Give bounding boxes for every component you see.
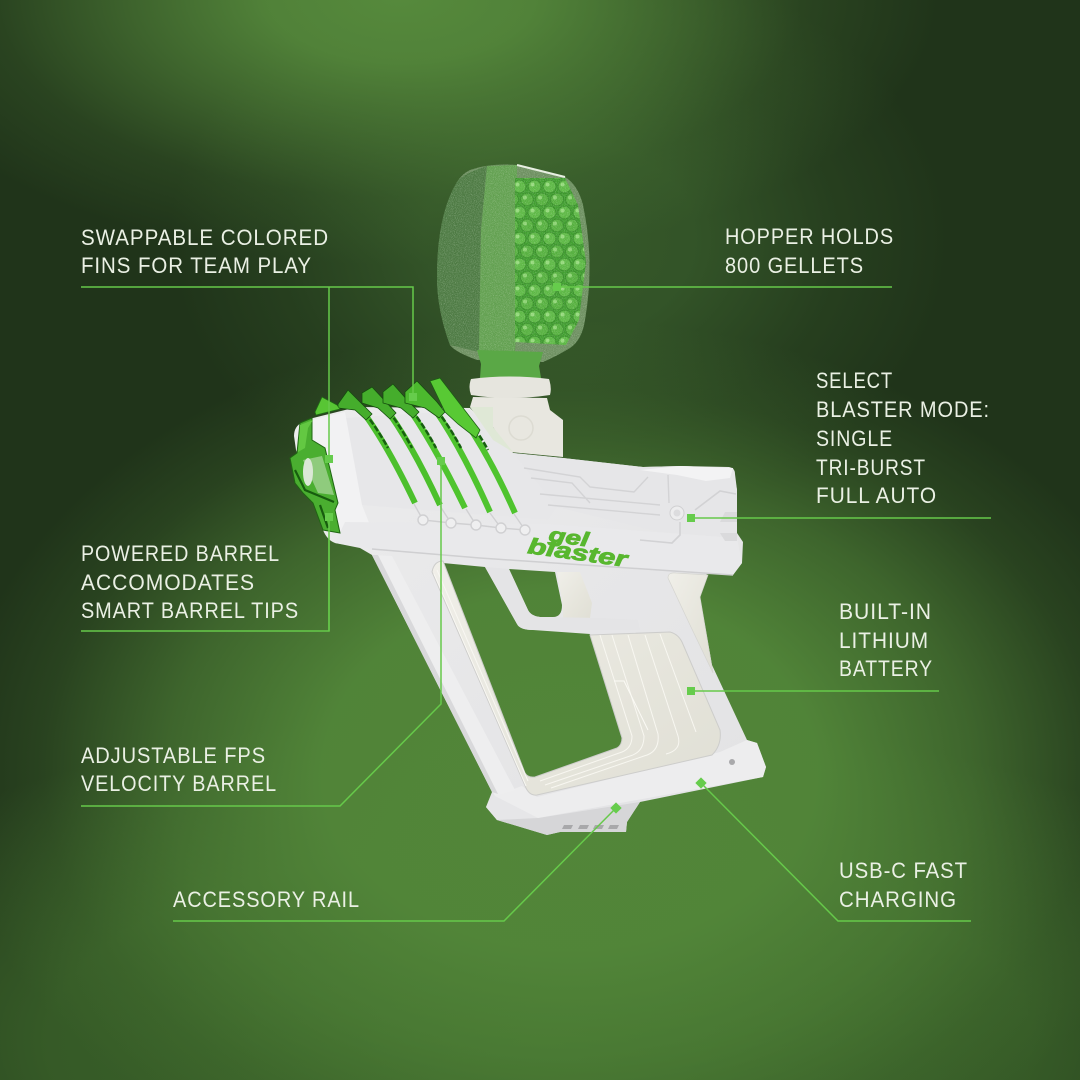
label: battery — [839, 599, 933, 681]
smart barrel muzzle — [290, 418, 340, 533]
hopper middle facet — [479, 165, 517, 358]
fin 1 — [338, 390, 415, 503]
label: hopper — [725, 224, 894, 278]
label: swappable fins: FINS FOR TEAM PLAY — [81, 253, 312, 278]
gel blaster logo — [526, 524, 631, 572]
leader line and markers: powered barrel — [325, 287, 333, 631]
fin link nodes — [414, 504, 530, 535]
front strut shade — [372, 555, 498, 794]
fin 2 — [362, 387, 440, 505]
leader line and marker: battery — [687, 687, 939, 695]
label: blaster mode: SELECT — [816, 368, 893, 393]
label: USB-C — [839, 858, 968, 912]
label: blaster mode: TRI-BURST — [816, 455, 926, 480]
label: adjustable FPS — [81, 743, 277, 796]
trigger — [557, 572, 592, 618]
fin base crest — [315, 397, 340, 415]
trigger guard — [485, 567, 640, 630]
label: adjustable FPS: VELOCITY BARREL — [81, 771, 277, 796]
receiver upper right — [513, 453, 737, 543]
grip screw — [729, 759, 735, 765]
label: powered barrel — [81, 541, 299, 623]
front strut highlight — [372, 555, 515, 796]
grip inlay — [432, 561, 720, 795]
label: blaster mode — [816, 368, 990, 508]
leader line and marker: accessory rail — [173, 802, 622, 921]
fin 3 — [383, 384, 465, 508]
label: swappable fins: SWAPPABLE COLORED — [81, 225, 329, 250]
label: hopper: HOPPER HOLDS — [725, 224, 894, 249]
leader line and marker: adjustable FPS — [81, 457, 445, 806]
receiver lower band — [335, 522, 742, 575]
label: battery: LITHIUM — [839, 628, 929, 653]
label: USB-C: USB-C FAST — [839, 858, 968, 883]
label: accessory rail: ACCESSORY RAIL — [173, 887, 360, 912]
hopper frosted grain — [437, 164, 590, 362]
leader line and marker: swappable fins — [81, 287, 417, 401]
label: powered barrel: SMART BARREL TIPS — [81, 598, 299, 623]
label: blaster mode: BLASTER MODE: — [816, 397, 990, 422]
backstrap inlay — [668, 573, 713, 673]
gel blaster logo: gel — [546, 524, 591, 552]
accessory rail — [486, 795, 640, 835]
leader line and marker: hopper — [553, 283, 892, 291]
label: swappable fins — [81, 225, 329, 278]
fins — [315, 378, 530, 535]
receiver rear panel — [303, 410, 557, 530]
fin 5 — [430, 378, 515, 513]
gel blaster product illustration — [290, 160, 766, 835]
hopper neck — [477, 350, 543, 378]
label: powered barrel: POWERED BARREL — [81, 541, 280, 566]
label: battery: BUILT-IN — [839, 599, 932, 624]
hopper — [437, 164, 590, 378]
hopper right facet with gellets — [515, 178, 586, 345]
hopper top glint — [517, 165, 565, 177]
hopper left facet — [437, 166, 487, 352]
label: USB-C: CHARGING — [839, 887, 957, 912]
label: battery: BATTERY — [839, 656, 933, 681]
hopper collar and mount — [470, 376, 563, 457]
leader line and marker: USB-C — [695, 777, 971, 921]
label: blaster mode: SINGLE — [816, 426, 893, 451]
gun body with window cut-outs — [294, 407, 766, 835]
receiver underside line — [372, 549, 733, 575]
lower frame face — [495, 740, 766, 818]
fin 4 — [405, 381, 490, 512]
label: hopper: 800 GELLETS — [725, 253, 864, 278]
label: blaster mode: FULL AUTO — [816, 483, 937, 508]
label: powered barrel: ACCOMODATES — [81, 570, 255, 595]
leader line: powered barrel, lower part behind gun — [81, 500, 329, 631]
gel blaster logo: blaster — [526, 533, 631, 572]
label: adjustable FPS: ADJUSTABLE FPS — [81, 743, 266, 768]
leader line and marker: blaster mode — [687, 514, 991, 522]
